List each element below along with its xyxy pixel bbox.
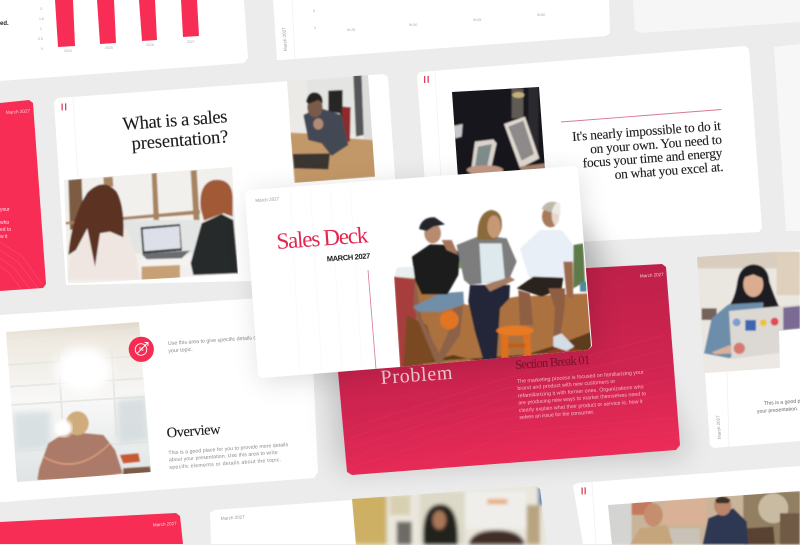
heading: overview: Overview <box>166 422 222 441</box>
panel: far right slide <box>774 44 800 231</box>
body text: about your presentation. Use this area to write <box>169 450 278 463</box>
panel: bottom center slide <box>210 482 550 544</box>
small text block <box>168 335 260 354</box>
accent mark <box>424 76 429 83</box>
stool <box>502 333 508 360</box>
photo: two women at laptop <box>60 163 247 283</box>
bar chart: 0.5 <box>38 37 43 41</box>
body text fragment: w it <box>0 234 8 240</box>
subtitle: march 2027: MARCH 2027 <box>326 251 371 263</box>
date label: March 2027 <box>255 196 280 203</box>
icon: target with percent: % <box>139 347 144 353</box>
body text fragment <box>0 207 11 240</box>
bar chart: 3 <box>40 7 42 11</box>
soft shadow of main slide <box>250 172 596 382</box>
bar chart <box>38 0 199 53</box>
body text fragment: your <box>0 207 10 213</box>
shadow under main slides <box>310 230 690 470</box>
date label: March 2027 <box>6 108 31 115</box>
panel: main sales deck slide <box>245 166 592 378</box>
axis labels: W-25 <box>347 28 355 32</box>
axis labels: W-80 <box>537 13 545 17</box>
photo: blurred office with woman <box>350 482 550 544</box>
body text fragment: ed to <box>0 227 11 233</box>
contour lines <box>290 185 362 372</box>
title: presentation? <box>131 127 229 154</box>
quote text: on what you excel at. <box>614 159 724 182</box>
title: What is a sales <box>122 107 228 135</box>
panel: woman with laptop slide <box>693 250 800 448</box>
axis labels: 5 <box>313 9 315 13</box>
man 2 <box>457 235 517 285</box>
axis labels: 0 <box>314 26 316 30</box>
date label: March 2027 <box>640 272 664 278</box>
heading: problem: Problem <box>380 362 454 389</box>
panel: bottom right team slide <box>573 466 800 544</box>
accent mark <box>62 103 66 110</box>
date label: March 2027 <box>715 415 722 439</box>
quote text: on your own. You need to <box>590 132 723 156</box>
body text fragment: who <box>0 220 9 226</box>
photo: man with laptop <box>287 75 375 183</box>
body text: brand and product with new customers or <box>517 379 616 392</box>
date label: March 2027 <box>281 27 288 51</box>
axis labels <box>313 9 545 32</box>
bar chart: 2027 <box>187 40 195 44</box>
contour lines <box>0 242 42 290</box>
panel: top right slide <box>633 0 800 33</box>
body text fragment <box>757 398 800 415</box>
bar chart: 2026 <box>146 43 154 47</box>
body text: clearly explain what their product or service is, how it <box>519 399 643 414</box>
small text block: Use this area to give specific details on <box>168 335 260 347</box>
body text: specific elements or details about the topic. <box>169 457 281 471</box>
date label: March 2027 <box>153 521 177 527</box>
contour lines <box>350 335 678 470</box>
body text: refamiliarizing it with former ones. Organizations who <box>518 384 644 399</box>
quote text: It's nearly impossible to do it <box>572 118 722 144</box>
divider rule <box>561 110 722 122</box>
small text block: your topic. <box>168 347 193 354</box>
photo: three friends on a wall <box>394 202 592 368</box>
body text fragment: This is a good p <box>764 398 800 407</box>
panel: what is a sales presentation slide <box>54 73 402 285</box>
body text <box>517 370 646 421</box>
title <box>122 107 229 154</box>
photo: man by bright window <box>6 322 151 482</box>
bar chart: 1.5 <box>39 17 44 21</box>
body text: The marketing process is focused on familiarizing your <box>517 370 644 385</box>
photo: woman with stickered laptop <box>693 252 800 378</box>
sun flare <box>550 202 562 226</box>
axis labels: W-65 <box>473 18 481 22</box>
quote text <box>572 118 724 182</box>
body text: are producing new ways to market themselves need to <box>518 391 646 406</box>
bar chart: 1 <box>40 27 42 31</box>
panel: bar chart slide <box>0 0 248 81</box>
panel: bottom left red slide <box>0 513 183 544</box>
vertical rule <box>368 270 376 369</box>
bar chart: 2025 <box>105 46 113 50</box>
man 1 <box>413 275 443 365</box>
photo: hands holding phones <box>452 87 545 175</box>
date label: March 2027 <box>221 514 245 521</box>
body text <box>168 442 289 471</box>
text fragment: ed. <box>0 21 9 27</box>
panel: left red slide <box>0 100 46 291</box>
body text: This is a good place for you to provide more details <box>168 442 289 456</box>
photo: team around a painting <box>607 488 800 544</box>
icon: target with percent <box>129 337 154 362</box>
accent mark <box>582 487 586 494</box>
body text: solves an issue for the consumer. <box>519 410 594 421</box>
body text fragment: your presentation. <box>757 406 799 415</box>
bar chart: 2024 <box>64 49 72 53</box>
panel: line chart slide <box>273 0 610 60</box>
panel: overview slide <box>0 295 318 502</box>
bar chart: 0 <box>41 47 43 51</box>
heading: section break: Section Break 01 <box>515 353 591 372</box>
title: sales deck: Sales Deck <box>276 222 370 254</box>
man 3 <box>520 230 573 280</box>
axis labels: W-50 <box>409 23 417 27</box>
quote text: focus your time and energy <box>582 145 723 170</box>
panel: section break red slide <box>330 264 680 475</box>
panel: quote slide with phones <box>417 46 762 250</box>
